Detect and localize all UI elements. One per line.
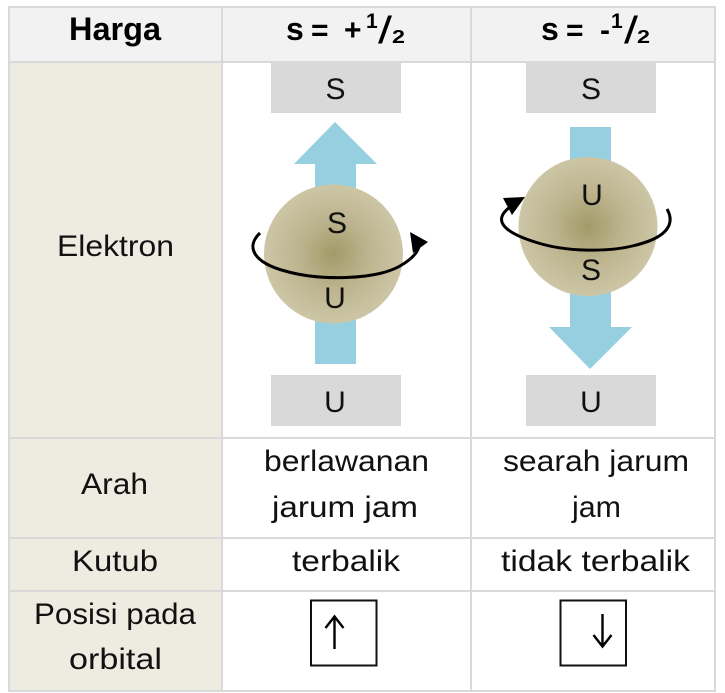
text: terbalik: terbalik xyxy=(292,545,401,578)
magnet pole U xyxy=(271,375,401,426)
row label: Posisi pada orbital xyxy=(34,598,196,676)
magnet pole U: U xyxy=(324,386,346,419)
sphere label U: U xyxy=(324,282,346,315)
magnet pole U: U xyxy=(580,386,602,419)
heading: s = +1/2: / xyxy=(378,10,393,52)
heading: s = +1/2: = xyxy=(311,14,329,47)
electron sphere xyxy=(264,184,403,324)
heading: s = +1/2: s xyxy=(286,11,304,47)
electron sphere xyxy=(518,157,658,296)
panel: first column background xyxy=(9,62,222,691)
row label: Elektron: Elektron xyxy=(57,230,174,263)
orbital box: up xyxy=(311,600,376,666)
row label: Posisi pada orbital: Posisi pada xyxy=(34,598,196,631)
text: searah jarum jam xyxy=(503,445,689,524)
row label: Kutub: Kutub xyxy=(72,545,158,578)
arrow: field up xyxy=(294,122,377,364)
heading: s = +1/2 xyxy=(286,10,405,52)
magnet pole S: S xyxy=(581,73,601,106)
text: berlawanan jarum jam: jarum jam xyxy=(271,491,418,524)
heading: s = -1/2: - xyxy=(600,14,610,47)
magnet pole S: S xyxy=(325,73,346,106)
heading: Harga: Harga xyxy=(69,11,161,47)
arrow: field down xyxy=(549,127,632,369)
text: tidak terbalik: tidak terbalik xyxy=(501,545,691,578)
text: berlawanan jarum jam xyxy=(264,445,429,524)
magnet pole U xyxy=(526,375,656,426)
rotation arrow xyxy=(502,197,670,250)
sphere label S: S xyxy=(581,254,601,287)
row label: Posisi pada orbital: orbital xyxy=(69,643,162,676)
heading: s = -1/2: = xyxy=(566,14,584,47)
heading: s = +1/2: 2 xyxy=(392,27,405,47)
heading: s = +1/2: 1 xyxy=(366,10,378,33)
panel: header row background xyxy=(9,7,715,62)
orbital box: down xyxy=(560,600,626,666)
heading: s = -1/2: / xyxy=(624,10,639,52)
sphere label S: S xyxy=(327,207,347,240)
magnet pole S xyxy=(271,62,401,113)
heading: s = +1/2: + xyxy=(344,14,362,47)
heading: s = -1/2: 1 xyxy=(611,10,623,33)
diagram: electron spin up xyxy=(253,62,428,426)
sphere label U: U xyxy=(581,179,603,212)
text: searah jarum jam: jam xyxy=(571,491,621,524)
heading: s = -1/2: s xyxy=(541,11,559,47)
heading: s = -1/2: 2 xyxy=(637,27,650,47)
text: berlawanan jarum jam: berlawanan xyxy=(264,445,429,478)
text: searah jarum jam: searah jarum xyxy=(503,445,689,478)
row label: Arah: Arah xyxy=(81,468,148,501)
magnet pole S xyxy=(526,62,656,113)
heading: s = -1/2 xyxy=(541,10,650,52)
diagram: electron spin down xyxy=(502,62,670,426)
rotation arrow xyxy=(253,232,428,278)
